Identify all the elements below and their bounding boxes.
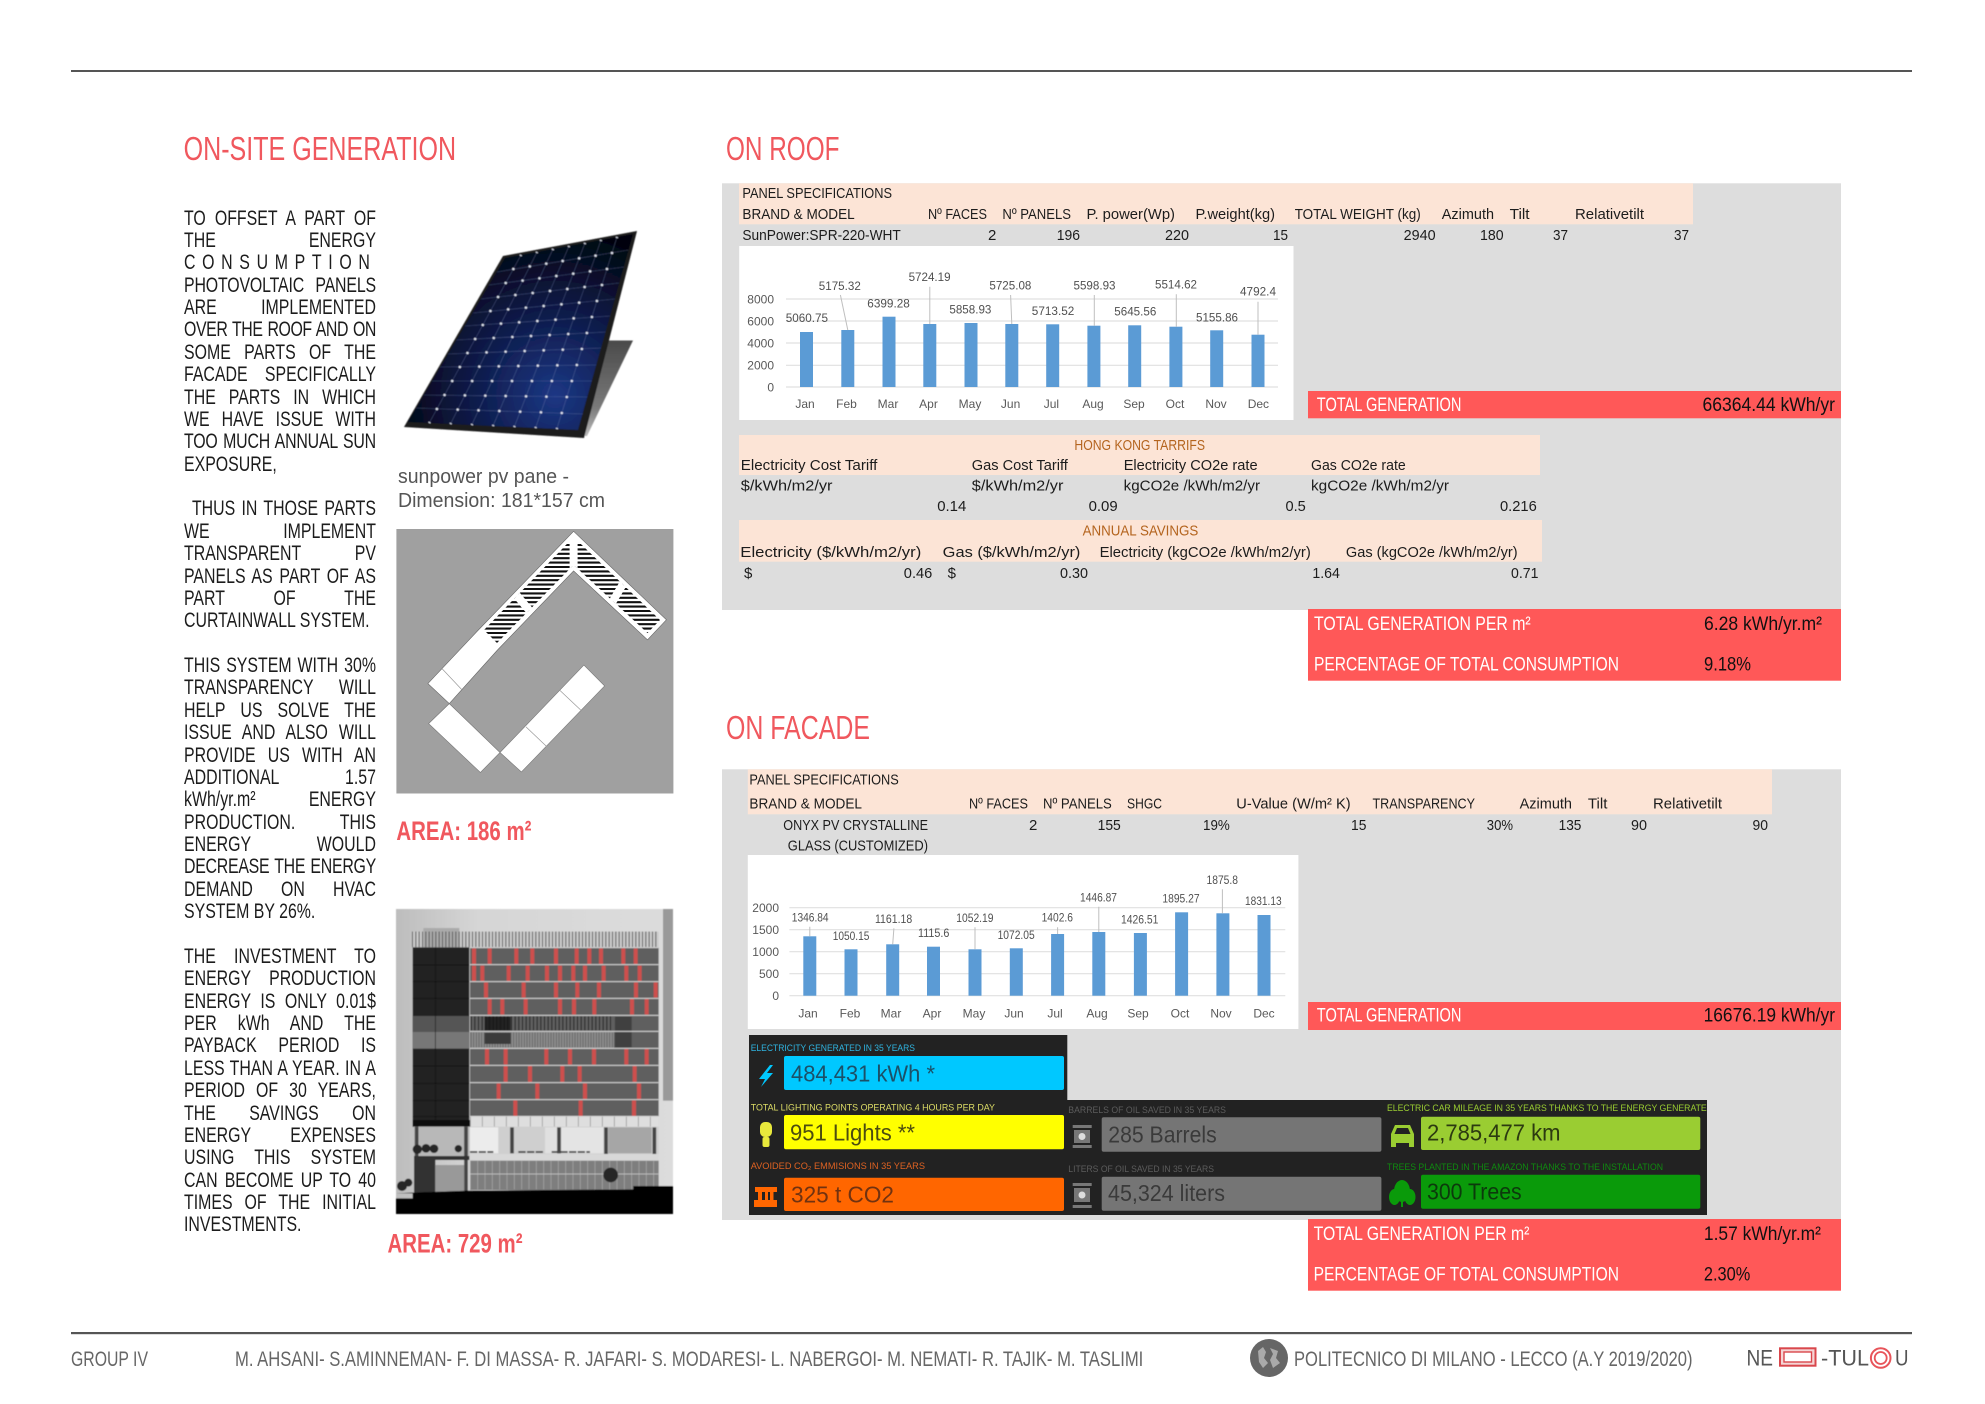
bar chart: facade monthly generation: Jul xyxy=(1047,1006,1063,1020)
panel specifications table: 135 xyxy=(1559,817,1581,834)
panel specifications table xyxy=(739,183,1693,244)
text block: project description: PRODUCTION. THIS xyxy=(184,811,376,834)
bar chart: facade monthly generation: Mar xyxy=(881,1006,901,1020)
caption: panel dimension: sunpower pv pane - xyxy=(398,466,569,488)
panel specifications table: BRAND & MODEL xyxy=(749,796,862,813)
bar chart: roof monthly generation: 5858.93 xyxy=(949,303,992,317)
logo: neo-tulou: U xyxy=(1895,1346,1908,1371)
metric: electricity xyxy=(751,1043,1064,1090)
table: annual savings: 1.64 xyxy=(1312,565,1340,582)
results block: roof: 6.28 kWh/yr.m² xyxy=(1704,613,1822,635)
bar chart: facade monthly generation: 1831.13 xyxy=(1245,894,1282,908)
text block: project description: DEMAND ON HVAC xyxy=(184,878,376,901)
logo: neo-tulou xyxy=(1746,1346,1908,1371)
top rule xyxy=(71,70,1912,72)
caption: panel dimension xyxy=(398,466,605,512)
metric: barrels: BARRELS OF OIL SAVED IN 35 YEARS xyxy=(1068,1105,1226,1116)
bar chart: roof monthly generation: Nov xyxy=(1205,397,1227,411)
results block: facade xyxy=(1308,1219,1841,1291)
table: hong kong tariffs: kgCO2e /kWh/m2/yr xyxy=(1124,478,1260,494)
bar chart: facade monthly generation: 1875.8 xyxy=(1206,873,1238,887)
bar chart: roof monthly generation: 4792.4 xyxy=(1240,284,1276,298)
panel specifications table: TOTAL WEIGHT (kg) xyxy=(1295,206,1421,223)
bar chart: roof monthly generation: 0 xyxy=(767,380,774,394)
text block: project description: FACADE SPECIFICALLY xyxy=(184,363,376,386)
metric: lights xyxy=(751,1102,1064,1149)
bar chart: facade monthly generation: May xyxy=(963,1006,985,1020)
bar chart: roof monthly generation: 5175.32 xyxy=(819,279,861,293)
bar chart: roof monthly generation: Apr xyxy=(919,397,938,411)
text block: project description: PERIOD OF 30 YEARS, xyxy=(184,1079,376,1102)
total generation bar: facade xyxy=(1308,1002,1841,1030)
text block: project description: WE IMPLEMENT xyxy=(184,520,376,543)
side strip xyxy=(663,909,673,1101)
panel specifications table xyxy=(748,769,1772,855)
metric: lights: 951 Lights ** xyxy=(790,1120,915,1146)
bar chart: roof monthly generation: 2000 xyxy=(747,359,774,373)
panel specifications table: Nº FACES xyxy=(928,206,987,223)
podium upper level xyxy=(414,1127,469,1160)
bar chart: facade monthly generation: Oct xyxy=(1171,1006,1190,1020)
panel specifications table: GLASS (CUSTOMIZED) xyxy=(788,838,928,855)
panel specifications table: ONYX PV CRYSTALLINE xyxy=(783,817,928,834)
panel specifications table: 37 xyxy=(1553,227,1568,244)
panel: on facade data xyxy=(722,769,1841,1220)
podium lower level xyxy=(414,1160,435,1193)
panel specifications table: TRANSPARENCY xyxy=(1372,796,1475,813)
bar chart: facade monthly generation: 1500 xyxy=(752,923,779,937)
metric: liters: 45,324 liters xyxy=(1108,1180,1225,1206)
text block: project description: ENERGY WOULD xyxy=(184,833,376,856)
bar chart: facade monthly generation: Jan xyxy=(798,1006,818,1020)
table: hong kong tariffs: 0.14 xyxy=(937,498,966,515)
trees xyxy=(397,1144,618,1191)
metric: trees: TREES PLANTED IN THE AMAZON THANKS TO THE INSTALLATION xyxy=(1387,1162,1663,1173)
table: annual savings xyxy=(739,520,1542,582)
panel specifications table: Azimuth xyxy=(1520,796,1572,813)
text block: project description: PHOTOVOLTAIC PANELS xyxy=(184,274,376,297)
striped pv rows xyxy=(484,544,660,643)
table: annual savings: $ xyxy=(744,565,753,582)
bar chart: facade monthly generation: 500 xyxy=(759,967,779,981)
results block: facade: 2.30% xyxy=(1704,1264,1750,1286)
bar chart: roof monthly generation: May xyxy=(959,397,981,411)
dashboard dark background xyxy=(749,1035,1707,1215)
results block: roof: PERCENTAGE OF TOTAL CONSUMPTION xyxy=(1314,654,1619,676)
heading: on facade: ON FACADE xyxy=(726,710,870,747)
panel specifications table: 2 xyxy=(988,227,996,244)
bar chart: roof monthly generation: 6399.28 xyxy=(867,296,910,310)
facade floors xyxy=(470,947,659,1117)
image: roof plan xyxy=(396,529,673,794)
bar chart: roof monthly generation: Dec xyxy=(1248,397,1269,411)
bar chart: facade monthly generation: Aug xyxy=(1086,1006,1108,1020)
metric: trees: 300 Trees xyxy=(1427,1178,1522,1204)
results block: roof: 9.18% xyxy=(1704,654,1751,676)
text block: project description: USING THIS SYSTEM xyxy=(184,1146,376,1169)
text block: project description: ISSUE AND ALSO WILL xyxy=(184,721,376,744)
logo: neo-tulou: -TUL xyxy=(1821,1346,1869,1371)
text block: project description: SOME PARTS OF THE xyxy=(184,341,376,364)
metric: car mileage: ELECTRIC CAR MILEAGE IN 35 YEARS THANKS TO THE ENERGY GENERATED xyxy=(1387,1103,1713,1114)
text block: project description: INVESTMENTS. xyxy=(184,1213,301,1236)
metric: car mileage xyxy=(1387,1103,1713,1150)
total generation bar: roof xyxy=(1308,391,1841,418)
table: annual savings: Gas (kgCO2e /kWh/m2/yr) xyxy=(1346,544,1518,561)
panel specifications table: 37 xyxy=(1674,227,1689,244)
bar chart: roof monthly generation: 4000 xyxy=(747,336,774,350)
panel specifications table: 180 xyxy=(1480,227,1504,244)
panel specifications table: Nº PANELS xyxy=(1043,796,1112,813)
text block: project description: THE SAVINGS ON xyxy=(184,1102,376,1124)
panel specifications table: Tilt xyxy=(1510,206,1530,223)
table: annual savings: 0.71 xyxy=(1511,565,1538,582)
metric: co2 xyxy=(751,1161,1064,1211)
text block: project description: ENERGY EXPENSES xyxy=(184,1124,376,1147)
bar chart: roof monthly generation: 5598.93 xyxy=(1074,278,1116,292)
metric: co2: 325 t CO2 xyxy=(791,1181,894,1207)
bar chart: facade monthly generation: 0 xyxy=(772,989,779,1003)
panel specifications table: Nº PANELS xyxy=(1002,206,1071,223)
metric: car mileage: 2,785,477 km xyxy=(1427,1120,1560,1146)
bar chart: facade monthly generation: Feb xyxy=(840,1006,861,1020)
plan background xyxy=(396,529,673,794)
panel specifications table: SunPower:SPR-220-WHT xyxy=(742,227,901,244)
table: annual savings: ANNUAL SAVINGS xyxy=(1083,522,1198,540)
panel specifications table: Relativetilt xyxy=(1575,206,1645,223)
L-shaped roof band xyxy=(428,531,666,704)
lower right roof piece xyxy=(500,665,605,772)
ground xyxy=(396,1186,673,1214)
text block: project description: ENERGY PRODUCTION xyxy=(184,967,376,990)
text block: project description: PER kWh AND THE xyxy=(184,1012,376,1035)
text block: project description: CONSUMPTION xyxy=(184,251,377,274)
panel specifications table: U-Value (W/m² K) xyxy=(1236,796,1351,813)
image: building elevation xyxy=(396,909,673,1214)
text block: project description: HELP US SOLVE THE xyxy=(184,699,376,722)
bar chart: roof monthly generation: 5724.19 xyxy=(909,270,951,284)
bar chart: facade monthly generation: Jun xyxy=(1004,1006,1024,1020)
table: hong kong tariffs: Electricity Cost Tariff xyxy=(741,457,878,474)
bar chart: roof monthly generation: 5645.56 xyxy=(1114,304,1157,318)
text block: project description: LESS THAN A YEAR. IN A xyxy=(184,1057,376,1080)
roof panel background xyxy=(722,183,1841,610)
facade panel background xyxy=(722,769,1841,1220)
metric: co2: AVOIDED CO₂ EMMISIONS IN 35 YEARS xyxy=(751,1161,925,1172)
text block: project description: THE ENERGY xyxy=(184,229,376,252)
panel specifications table: Tilt xyxy=(1588,796,1608,813)
bar chart: facade monthly generation: Nov xyxy=(1210,1006,1232,1020)
text block: project description: TRANSPARENT PV xyxy=(184,542,376,565)
table: hong kong tariffs: Gas Cost Tariff xyxy=(972,457,1069,474)
bar chart: roof monthly generation: Jun xyxy=(1001,397,1020,411)
text block: project description: kWh/yr.m² ENERGY xyxy=(184,788,376,811)
total generation bar: roof: 66364.44 kWh/yr xyxy=(1702,394,1835,416)
text block: project description: PANELS AS PART OF AS xyxy=(184,564,376,588)
footer: group: GROUP IV xyxy=(71,1348,148,1371)
panel specifications table: 30% xyxy=(1487,817,1513,834)
bar chart: roof monthly generation: Aug xyxy=(1082,397,1104,411)
bar chart: roof monthly generation: Oct xyxy=(1166,397,1185,411)
results block: facade: 1.57 kWh/yr.m² xyxy=(1704,1223,1821,1245)
elevation background xyxy=(396,909,673,1214)
table: hong kong tariffs: $/kWh/m2/yr xyxy=(741,478,832,494)
text block: project description: PROVIDE US WITH AN xyxy=(184,744,376,766)
bar chart: roof monthly generation: 5514.62 xyxy=(1155,277,1197,291)
panel frame xyxy=(404,231,637,438)
red pv panels xyxy=(474,948,656,1116)
text block: project description: CURTAINWALL SYSTEM. xyxy=(184,609,370,632)
table: annual savings: $ xyxy=(948,565,957,582)
results block: facade: PERCENTAGE OF TOTAL CONSUMPTION xyxy=(1314,1264,1619,1286)
roof piece separators xyxy=(442,669,581,746)
panel specifications table: 15 xyxy=(1273,227,1288,244)
label: roof area: AREA: 186 m² xyxy=(396,816,531,846)
image: solar panel xyxy=(404,231,637,438)
bar chart: roof monthly generation: 5713.52 xyxy=(1032,304,1075,318)
table: hong kong tariffs: 0.5 xyxy=(1286,498,1306,515)
table: hong kong tariffs: Electricity CO2e rate xyxy=(1124,457,1258,474)
bar chart: facade monthly generation: Apr xyxy=(923,1006,941,1020)
panel specifications table: 155 xyxy=(1098,817,1121,834)
text block: project description xyxy=(184,206,377,1236)
bar chart: facade monthly generation: 1000 xyxy=(752,945,779,959)
table: hong kong tariffs: kgCO2e /kWh/m2/yr xyxy=(1311,478,1449,494)
table: annual savings: Electricity ($/kWh/m2/yr) xyxy=(740,544,921,561)
bar chart: roof monthly generation: 5155.86 xyxy=(1196,310,1238,324)
caption: panel dimension: Dimension: 181*157 cm xyxy=(398,490,605,512)
bar chart: roof monthly generation: Sep xyxy=(1123,397,1145,411)
bar chart: facade monthly generation: Dec xyxy=(1253,1006,1275,1020)
bar chart: facade monthly generation xyxy=(748,855,1298,1029)
total generation bar: facade: 16676.19 kWh/yr xyxy=(1704,1004,1835,1026)
bar chart: roof monthly generation: 5060.75 xyxy=(786,311,828,325)
bar chart: facade monthly generation: 1402.6 xyxy=(1042,910,1073,924)
bar chart: facade monthly generation: 2000 xyxy=(752,901,779,915)
dashboard: 35-year impact xyxy=(749,1035,1713,1215)
bar chart: roof monthly generation: 6000 xyxy=(747,314,774,328)
bar chart: roof monthly generation: Jan xyxy=(795,397,815,411)
metric: liters xyxy=(1068,1164,1381,1211)
panel specifications table: P.weight(kg) xyxy=(1196,206,1275,223)
panel specifications table: Azimuth xyxy=(1442,206,1494,223)
panel specifications table: P. power(Wp) xyxy=(1086,206,1175,223)
table: hong kong tariffs: $/kWh/m2/yr xyxy=(972,478,1063,494)
table: annual savings: Electricity (kgCO2e /kWh/m2/yr) xyxy=(1100,544,1311,561)
table: hong kong tariffs xyxy=(739,435,1540,515)
results block: roof: TOTAL GENERATION PER m² xyxy=(1314,613,1531,635)
text block: project description: WE HAVE ISSUE WITH xyxy=(184,408,376,431)
panel specifications table: 90 xyxy=(1752,817,1768,834)
results block: facade: TOTAL GENERATION PER m² xyxy=(1314,1223,1530,1245)
metric: liters: LITERS OF OIL SAVED IN 35 YEARS xyxy=(1068,1164,1214,1175)
metric: lights: TOTAL LIGHTING POINTS OPERATING 4 HOURS PER DAY xyxy=(751,1102,996,1114)
panel specifications table: Relativetilt xyxy=(1653,796,1723,813)
metric: trees xyxy=(1387,1162,1700,1209)
roof louvres xyxy=(412,932,659,947)
metric: electricity: 484,431 kWh * xyxy=(791,1061,935,1087)
table: hong kong tariffs: 0.216 xyxy=(1500,498,1537,515)
text block: project description: ADDITIONAL 1.57 xyxy=(184,766,376,789)
bar chart: roof monthly generation: Feb xyxy=(836,397,857,411)
text block: project description: SYSTEM BY 26%. xyxy=(184,900,315,923)
soffit band xyxy=(470,1117,659,1127)
panel shadow xyxy=(572,340,633,436)
text block: project description: PART OF THE xyxy=(184,587,376,610)
text block: project description: THE PARTS IN WHICH xyxy=(184,386,376,408)
table: annual savings: 0.30 xyxy=(1060,565,1088,582)
table: hong kong tariffs: 0.09 xyxy=(1089,498,1118,515)
bar chart: roof monthly generation: 8000 xyxy=(747,292,774,306)
metric: barrels xyxy=(1068,1105,1381,1152)
heading: on roof: ON ROOF xyxy=(726,131,840,168)
bar chart: facade monthly generation: 1050.15 xyxy=(833,929,870,943)
panel specifications table: 90 xyxy=(1631,817,1647,834)
metric: electricity: ELECTRICITY GENERATED IN 35 YEARS xyxy=(751,1043,915,1054)
bar chart: facade monthly generation: 1426.51 xyxy=(1121,912,1159,926)
bar chart: facade monthly generation: Sep xyxy=(1127,1006,1149,1020)
panel specifications table: Nº FACES xyxy=(969,796,1028,813)
text block: project description: TOO MUCH ANNUAL SUN xyxy=(184,430,376,453)
bar chart: roof monthly generation xyxy=(739,246,1294,420)
text block: project description: CAN BECOME UP TO 40 xyxy=(184,1169,376,1192)
text block: project description: THUS IN THOSE PARTS xyxy=(192,497,376,520)
bar chart: facade monthly generation: 1115.6 xyxy=(918,926,950,940)
text block: project description: TRANSPARENCY WILL xyxy=(184,676,376,699)
text block: project description: TO OFFSET A PART OF xyxy=(184,206,376,230)
text block: project description: PAYBACK PERIOD IS xyxy=(184,1034,376,1057)
panel specifications table: 15 xyxy=(1351,817,1366,834)
text block: project description: ARE IMPLEMENTED xyxy=(184,296,376,319)
table: annual savings: Gas ($/kWh/m2/yr) xyxy=(943,544,1080,561)
total generation bar: roof: TOTAL GENERATION xyxy=(1317,394,1461,416)
bar chart: facade monthly generation: 1072.05 xyxy=(998,928,1035,942)
panel cells xyxy=(408,234,633,430)
table: hong kong tariffs: Gas CO2e rate xyxy=(1311,457,1406,474)
text block: project description: DECREASE THE ENERGY xyxy=(184,855,376,878)
bar chart: facade monthly generation: 1895.27 xyxy=(1162,892,1200,906)
label: facade area: AREA: 729 m² xyxy=(388,1229,523,1259)
metric: barrels: 285 Barrels xyxy=(1108,1121,1217,1147)
table: hong kong tariffs: HONG KONG TARRIFS xyxy=(1074,437,1205,454)
heading: on-site generation: ON-SITE GENERATION xyxy=(184,131,456,168)
floor slabs xyxy=(470,948,659,1116)
panel specifications table: BRAND & MODEL xyxy=(742,206,855,223)
table: annual savings: 0.46 xyxy=(904,565,932,582)
bar chart: facade monthly generation: 1446.87 xyxy=(1080,890,1117,904)
bar chart: facade monthly generation: 1161.18 xyxy=(875,912,912,926)
panel: on roof data xyxy=(722,183,1841,610)
text block: project description: THIS SYSTEM WITH 30% xyxy=(184,654,376,677)
footer: university: POLITECNICO DI MILANO - LECCO (A.Y 2019/2020) xyxy=(1294,1348,1692,1371)
bar chart: roof monthly generation: 5725.08 xyxy=(989,278,1032,292)
dark tower xyxy=(413,947,469,1127)
footer: authors: M. AHSANI- S.AMINNEMAN- F. DI MASSA- R. JAFARI- S. MODARESI- L. NABERGOI- M. NEMATI- R. TAJIK- M. TASLIMI xyxy=(235,1348,1143,1371)
panel specifications table: 2940 xyxy=(1404,227,1436,244)
lower left roof piece xyxy=(429,704,500,772)
results block: roof xyxy=(1308,609,1841,681)
text block: project description: ENERGY IS ONLY 0.01$ xyxy=(184,990,376,1013)
bar chart: roof monthly generation: Jul xyxy=(1044,397,1059,411)
panel specifications table: 19% xyxy=(1203,817,1230,834)
text block: project description: OVER THE ROOF AND ON xyxy=(184,318,376,341)
bar chart: roof monthly generation: Mar xyxy=(878,397,898,411)
bar chart: facade monthly generation: 1052.19 xyxy=(956,911,994,925)
panel specifications table: SHGC xyxy=(1127,796,1162,813)
panel specifications table: 2 xyxy=(1029,817,1037,834)
panel specifications table: PANEL SPECIFICATIONS xyxy=(742,185,892,202)
text block: project description: EXPOSURE, xyxy=(184,453,277,476)
panel specifications table: 220 xyxy=(1165,227,1189,244)
text block: project description: TIMES OF THE INITIAL xyxy=(184,1191,376,1214)
cell corner dots xyxy=(429,237,617,429)
cell grid xyxy=(416,237,628,429)
text block: project description: THE INVESTMENT TO xyxy=(184,945,376,968)
icon: university seal xyxy=(1250,1339,1288,1377)
panel specifications table: 196 xyxy=(1057,227,1080,244)
logo: neo-tulou: NE xyxy=(1746,1346,1773,1371)
bar chart: facade monthly generation: 1346.84 xyxy=(792,910,829,924)
footer rule xyxy=(71,1332,1912,1334)
panel specifications table: PANEL SPECIFICATIONS xyxy=(749,772,899,788)
total generation bar: facade: TOTAL GENERATION xyxy=(1317,1004,1461,1026)
